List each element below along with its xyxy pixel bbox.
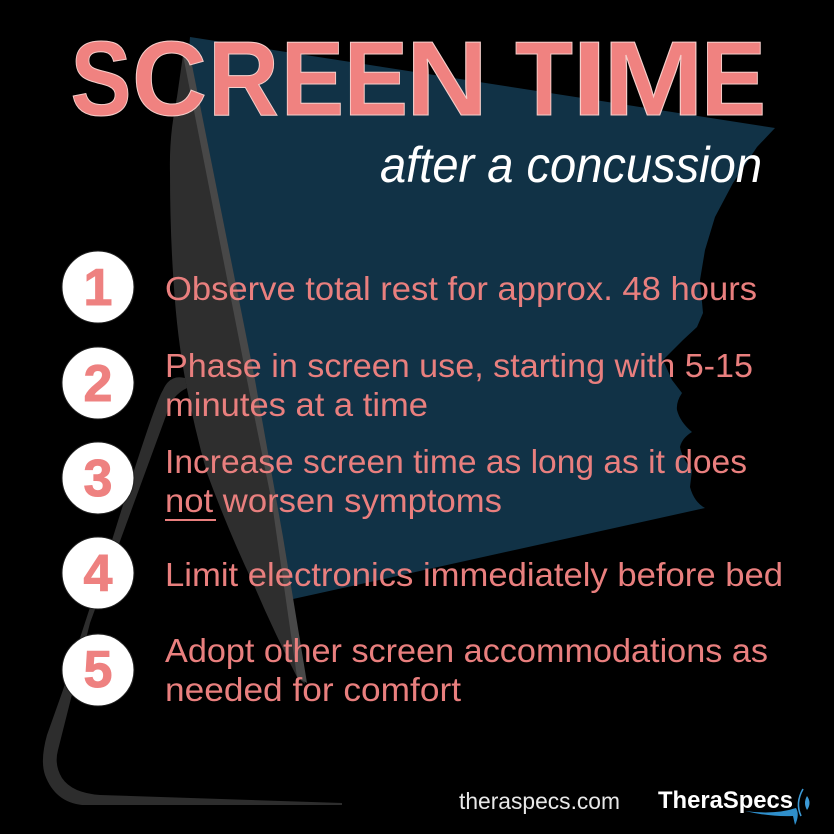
logo swoosh xyxy=(745,808,798,825)
title: E xyxy=(281,20,344,138)
website url: theraspecs.com xyxy=(459,788,620,814)
title: C xyxy=(132,20,207,138)
step 2 text: Phase in screen use, starting with 5-15 xyxy=(165,347,753,384)
number badge 4 xyxy=(62,537,134,609)
step 5 text: Adopt other screen accommodations as xyxy=(165,632,768,669)
title: S xyxy=(70,20,132,138)
step 5 xyxy=(62,632,768,708)
step 5 text: needed for comfort xyxy=(165,671,461,708)
number badge 4: 4 xyxy=(84,545,113,603)
title: E xyxy=(701,20,766,138)
illustration: monitor edge xyxy=(183,55,307,683)
step 1 text: Observe total rest for approx. 48 hours xyxy=(165,270,757,307)
step 2 xyxy=(62,347,753,423)
step 2 text xyxy=(165,347,753,423)
step 2 text: minutes at a time xyxy=(165,386,428,423)
title: E xyxy=(344,20,408,138)
step 3 text xyxy=(165,443,747,521)
number badge 5 xyxy=(62,634,134,706)
step 3 xyxy=(62,442,747,521)
logo eye icon xyxy=(798,789,810,816)
subtitle: after a concussion xyxy=(380,137,762,193)
number badge 2 xyxy=(62,347,134,419)
illustration: monitor stand xyxy=(43,377,342,805)
title xyxy=(70,20,766,138)
number badge 1 xyxy=(62,251,134,323)
title: R xyxy=(208,20,279,138)
number badge 2: 2 xyxy=(84,355,112,413)
step 4 text: Limit electronics immediately before bed xyxy=(165,556,783,593)
title: N xyxy=(406,20,488,138)
title: T xyxy=(515,20,573,138)
illustration: monitor back xyxy=(170,55,305,684)
step 4 xyxy=(62,537,783,609)
title: I xyxy=(572,20,607,138)
step 3 text: not worsen symptoms xyxy=(165,482,502,519)
number badge 5: 5 xyxy=(84,641,112,699)
title: M xyxy=(603,20,704,138)
number badge 1: 1 xyxy=(84,259,112,317)
step 5 text xyxy=(165,632,768,708)
step 1 xyxy=(62,251,757,323)
logo wordmark: TheraSpecs xyxy=(658,787,793,814)
illustration: head silhouette and screen light xyxy=(188,37,775,599)
number badge 3 xyxy=(62,442,134,514)
number badge 3: 3 xyxy=(84,450,112,508)
brand logo xyxy=(658,787,810,825)
step 3 text: Increase screen time as long as it does xyxy=(165,443,747,480)
